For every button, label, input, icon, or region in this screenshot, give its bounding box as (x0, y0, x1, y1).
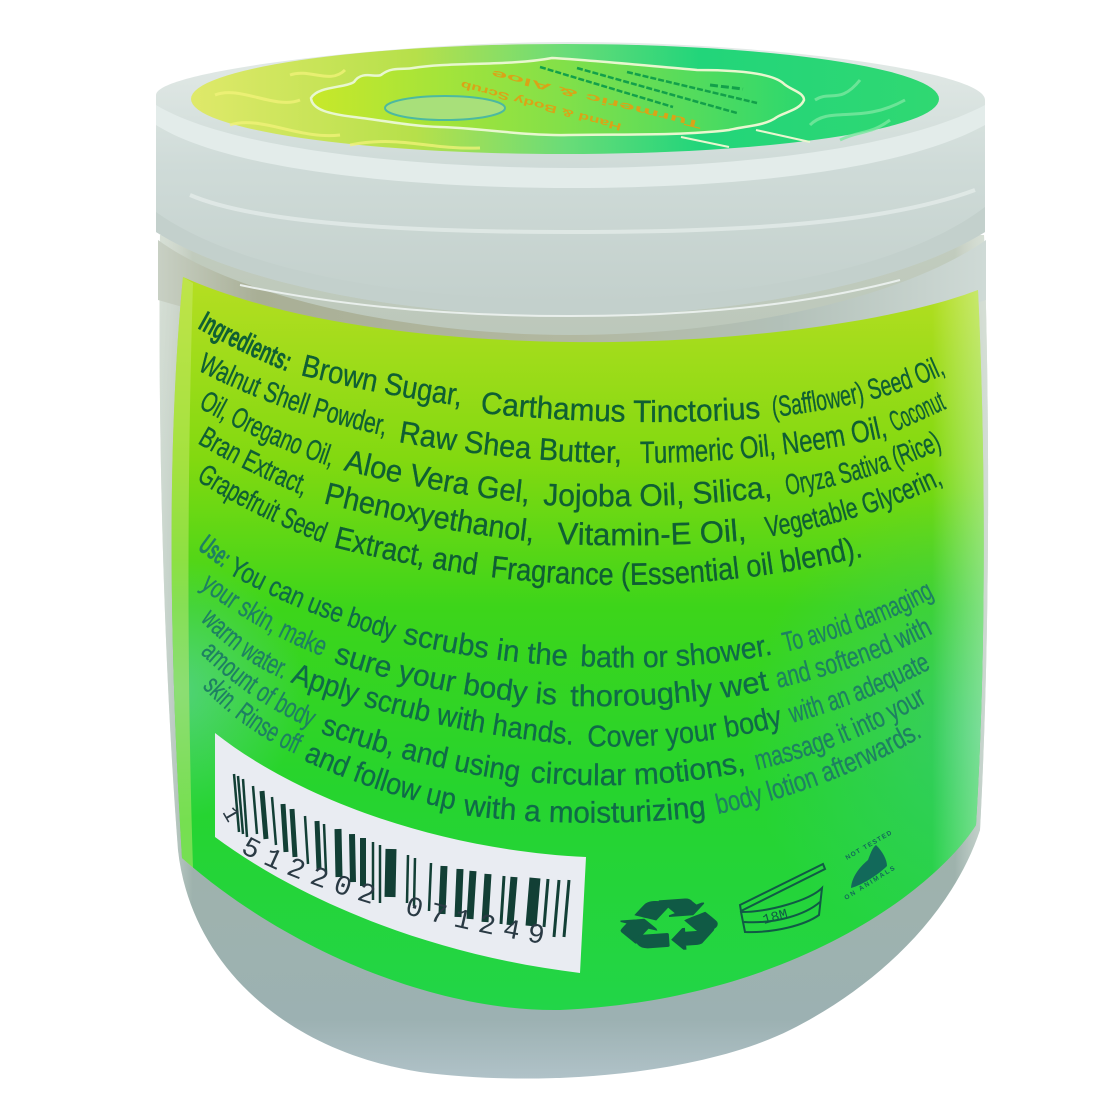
icon: recycling symbol: ♻ (609, 882, 730, 971)
ingredients line 4: Bran Extract, (198, 426, 304, 498)
ingredients line 5 (200, 466, 862, 592)
icon: not tested on animals rabbit (843, 830, 897, 902)
barcode bars (234, 774, 569, 937)
cloud outline panel (311, 58, 804, 135)
use line 2: sure your body is (334, 648, 556, 708)
use line 2: your skin, make (197, 575, 326, 655)
use line 3: Apply scrub with hands. (290, 665, 572, 745)
ingredients line 1 (198, 311, 946, 423)
ingredients line 4: Vitamin-E Oil, (558, 518, 744, 546)
use line 1: Use: (200, 534, 230, 568)
neck of jar (158, 240, 986, 360)
ingredients line 3: Oryza Sativa (Rice) (786, 431, 942, 498)
ingredients line 4 (198, 426, 943, 546)
lid ornament (215, 70, 480, 148)
ingredients line 1: Carthamus Tinctorius (482, 392, 760, 422)
ingredients line 2 (200, 352, 947, 468)
use line 4: massage it into your (754, 689, 924, 770)
use line 5: and follow up (305, 748, 455, 814)
icon: not tested on animals rabbit: NOT TESTED (844, 830, 893, 862)
ingredients line 4: Vegetable Glycerin, (764, 472, 943, 538)
ingredients line 3: Oil, Oregano Oil, (201, 392, 332, 470)
use line 4: amount of body (202, 644, 316, 730)
use line 3: Cover your body (588, 708, 780, 751)
lid white stripes (681, 130, 810, 147)
use directions text (197, 534, 935, 824)
lid (156, 42, 985, 316)
barcode (215, 733, 586, 973)
lid rim (156, 105, 985, 188)
icon: 18 month open jar: 18M (761, 907, 790, 929)
barcode background (215, 733, 586, 973)
ingredients line 5: Extract, and (335, 526, 478, 575)
lid ridge highlight (190, 190, 975, 232)
lid top sticker (191, 44, 939, 154)
use line 2 (197, 575, 932, 710)
ingredients line 1: (Safflower) Seed Oil, (773, 356, 946, 423)
icon: 18 month open jar (740, 864, 825, 932)
use line 5 (204, 678, 922, 824)
use line 1: To avoid damaging (780, 584, 935, 651)
lid bottom edge (240, 280, 900, 316)
use line 3 (202, 610, 930, 751)
ingredients line 3: Aloe Vera Gel, (343, 451, 527, 507)
lid upside down product name (459, 67, 703, 133)
use line 1: bath or shower. (582, 640, 771, 668)
ingredients line 5: Fragrance (Essential oil blend). (492, 538, 862, 592)
label colour falloff (172, 290, 984, 906)
icon: not tested on animals rabbit: ON ANIMALS (843, 865, 897, 902)
use line 4: circular motions, (532, 758, 744, 786)
lid ornament right (810, 80, 905, 140)
lid upside down product name: Hand & Body Scrub (459, 78, 623, 133)
back label (172, 277, 984, 1010)
use line 1: scrubs in the (404, 628, 567, 666)
use line 5: body lotion afterwards. (715, 727, 922, 814)
ingredients line 5: Grapefruit Seed (200, 466, 329, 542)
use line 3: with an adequate (788, 656, 930, 722)
use line 4 (202, 644, 924, 787)
ingredients line 3: Jojoba Oil, Silica, (544, 478, 770, 513)
lid small mark (710, 85, 743, 89)
use line 5: skin. Rinse off (204, 678, 304, 754)
barcode leading digit: 1 (216, 803, 244, 827)
use line 2: thoroughly wet (570, 672, 769, 710)
barcode digits: 512202 071249 (236, 832, 547, 953)
use line 5: with a moisturizing (464, 796, 705, 824)
use line 3: warm water. (202, 610, 286, 679)
ingredients line 2: Raw Shea Butter, (400, 421, 620, 468)
lid seal logo (385, 96, 505, 120)
use line 2: and softened with (776, 618, 932, 688)
use line 1: You can use body (232, 556, 397, 643)
jar body (160, 235, 988, 1079)
ingredients line 1: Ingredients: (198, 311, 292, 372)
label left wrap shading (172, 277, 193, 868)
lid upside down product name: Turmeric & Aloe (489, 67, 703, 131)
lid small print lines (540, 67, 757, 113)
ingredients text (198, 311, 947, 592)
ingredients line 2: Coconut (890, 392, 947, 430)
ingredients line 3 (201, 392, 942, 513)
ingredients line 2: Turmeric Oil, Neem Oil, (640, 416, 886, 464)
lid lower band (156, 207, 985, 316)
use line 4: scrub, and using (322, 719, 520, 787)
ingredients line 2: Walnut Shell Powder, (200, 352, 384, 439)
ingredients line 4: Phenoxyethanol, (325, 482, 532, 546)
use line 1 (200, 534, 935, 668)
ingredients line 1: Brown Sugar, (302, 354, 460, 410)
lid side wall (156, 42, 985, 316)
